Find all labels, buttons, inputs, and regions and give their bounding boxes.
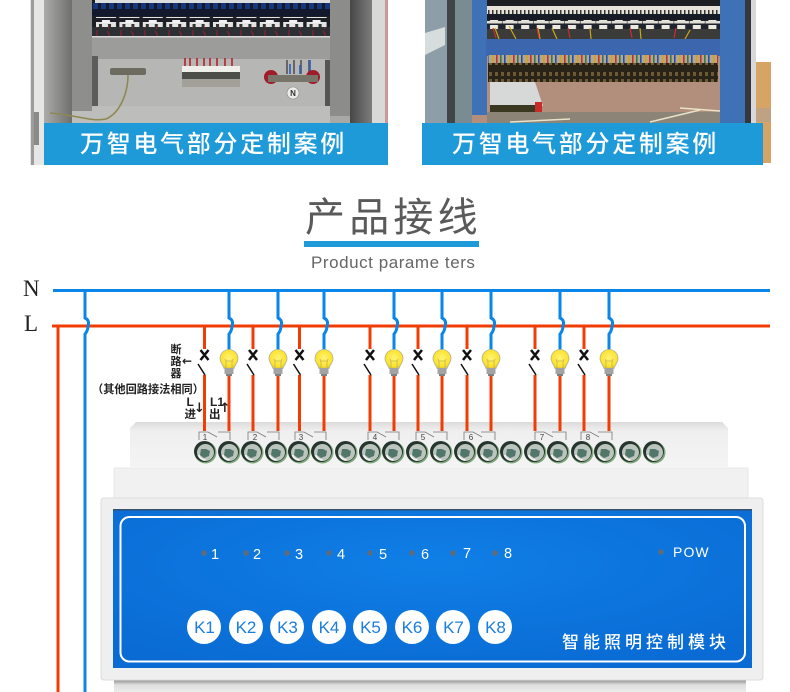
breaker switches [198, 350, 588, 375]
channel numbers: 2 [253, 547, 261, 563]
banner: left caption [44, 123, 388, 165]
breaker annotation: （其他回路接法相同） [92, 381, 204, 397]
lamps [220, 350, 618, 376]
terminal channel numbers: 3 [299, 433, 304, 442]
breaker annotation: ← [182, 354, 192, 368]
key labels: K8 [485, 618, 506, 637]
main busbars and feed wires [52, 290, 770, 692]
terminal channel numbers: 4 [373, 433, 378, 442]
key labels: K3 [277, 618, 298, 637]
terminal channel brackets [199, 432, 612, 440]
title underline [304, 241, 479, 247]
key buttons [187, 610, 512, 644]
neutral bar [264, 60, 320, 99]
breaker annotation: L [186, 395, 194, 409]
photo: right control cabinet [425, 0, 771, 163]
channel numbers: 6 [421, 547, 429, 563]
channel LEDs [201, 549, 664, 556]
channel numbers: 4 [337, 547, 345, 563]
grounding bar and wire [50, 68, 146, 120]
breaker annotation: 路 [170, 353, 182, 369]
breaker annotation: ↑ [220, 401, 230, 416]
key labels: K2 [236, 618, 256, 637]
channel numbers: 7 [463, 546, 471, 562]
subtitle: Product parame ters [311, 253, 475, 272]
terminal screws [194, 441, 666, 464]
terminal channel numbers: 7 [540, 433, 545, 442]
key labels: K1 [194, 618, 215, 637]
banner: right caption: 万智电气部分定制案例 [452, 124, 719, 159]
key labels: K6 [402, 618, 422, 637]
neutral bar: N [290, 89, 296, 98]
terminal channel numbers: 6 [469, 433, 474, 442]
terminal channel numbers: 1 [203, 433, 208, 442]
lamp neutral wires [229, 291, 613, 350]
module: terminal housing [114, 422, 748, 692]
key labels: K5 [360, 618, 381, 637]
module name: 智能照明控制模块 [562, 628, 730, 653]
breaker annotation: 断 [170, 341, 182, 357]
label: N: N [23, 276, 40, 301]
terminal channel numbers: 5 [421, 433, 426, 442]
key labels [194, 618, 506, 637]
breaker annotation: 器 [170, 365, 182, 381]
channel numbers: 8 [504, 546, 512, 562]
key labels: K7 [443, 618, 464, 637]
key labels: K4 [319, 618, 339, 637]
POW label: POW [673, 544, 710, 560]
terminal channel numbers: 2 [253, 433, 258, 442]
channel numbers: 5 [379, 547, 387, 563]
channel numbers [211, 546, 512, 563]
terminal block [182, 58, 240, 87]
terminal channel numbers [203, 433, 591, 442]
breaker annotation [92, 341, 230, 422]
title: 产品接线 [305, 185, 482, 243]
banner: right caption [422, 123, 763, 165]
terminal channel numbers: 8 [586, 433, 591, 442]
channel numbers: 1 [211, 547, 219, 563]
module: front panel [101, 498, 763, 680]
breaker annotation: L1 [210, 395, 224, 409]
photo: left control cabinet [30, 0, 388, 165]
switch and lamp live wires [204, 326, 609, 431]
label: L: L [24, 311, 38, 336]
breaker annotation: ↓ [194, 401, 205, 416]
breaker annotation: 进 [184, 406, 196, 422]
banner: left caption: 万智电气部分定制案例 [80, 124, 347, 159]
breaker annotation: 出 [209, 406, 220, 422]
channel numbers: 3 [295, 547, 303, 563]
